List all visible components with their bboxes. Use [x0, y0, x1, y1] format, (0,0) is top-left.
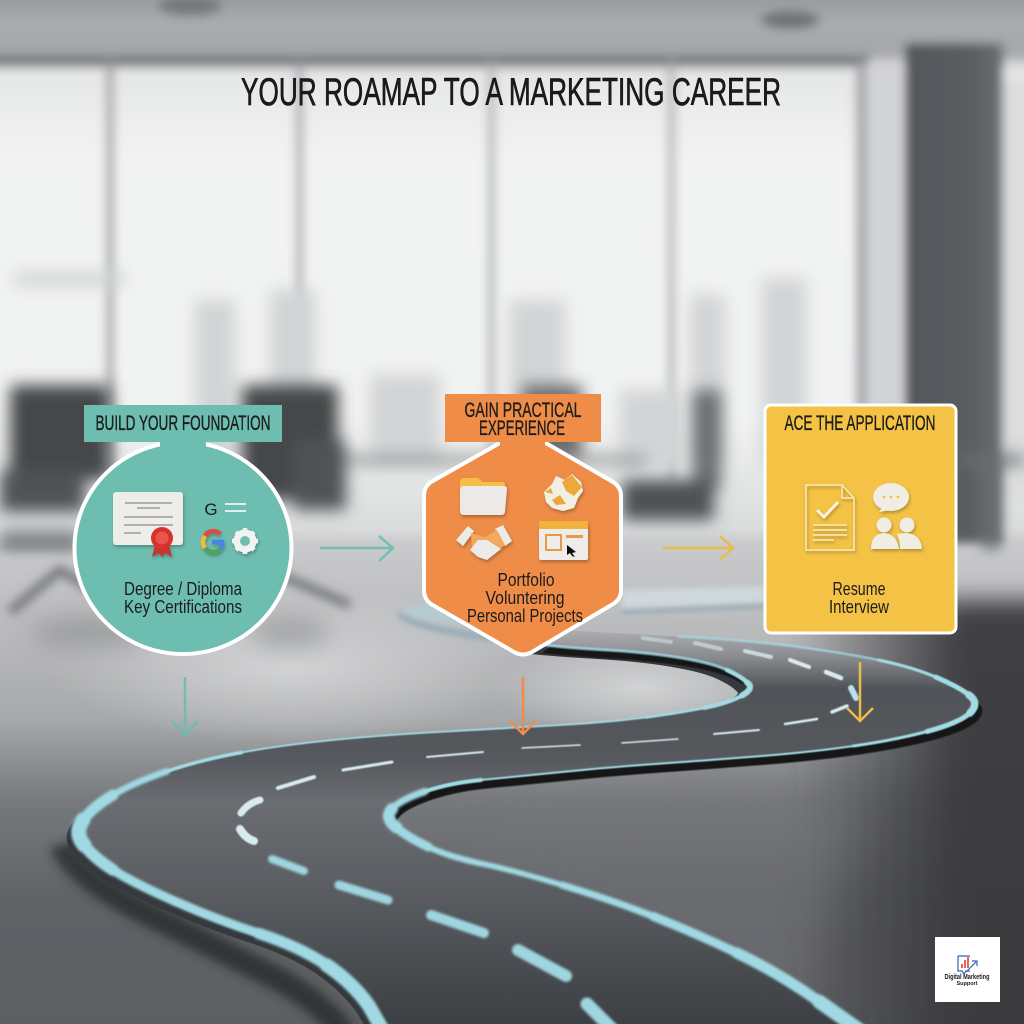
body text [829, 579, 890, 617]
arrow: teal right [320, 536, 393, 561]
icon: G and lines: G [204, 500, 218, 519]
heading: BUILD YOUR FOUNDATION [96, 412, 270, 435]
body text: Interview [829, 597, 890, 617]
heading: GAIN PRACTICAL [464, 399, 582, 422]
logo: Support [956, 981, 978, 987]
icon: resume [806, 485, 854, 550]
panel: gain practical experience [424, 394, 621, 654]
arrow: teal down [172, 677, 198, 735]
glowing right edge line far part [425, 636, 975, 792]
icon: certificate [113, 492, 183, 557]
icon: google g [203, 531, 222, 552]
body text [467, 570, 583, 626]
title: YOUR ROAMAP TO A MARKETING CAREER [241, 71, 781, 114]
connector under banner [500, 430, 545, 448]
card [765, 405, 956, 633]
body text: Personal Projects [467, 606, 583, 626]
icon: crumpled paper [544, 474, 583, 511]
body text: Voluntering [486, 588, 564, 608]
road rim left [70, 636, 966, 1024]
body text: Degree / Diploma [124, 579, 243, 599]
heading [464, 399, 582, 440]
icon: handshake [456, 525, 512, 560]
icon: interview people [871, 483, 922, 549]
heading banner [84, 405, 282, 442]
icon: gear [232, 528, 258, 554]
icon: browser window [539, 521, 588, 560]
heading: EXPERIENCE [479, 417, 565, 440]
road rim right [85, 637, 981, 1024]
floor [0, 552, 1024, 1024]
road shadow near the left edge [62, 845, 345, 1024]
arrow: yellow down [847, 662, 873, 721]
far blurred road section [400, 586, 765, 640]
heading: ACE THE APPLICATION [784, 412, 936, 435]
body text [124, 579, 243, 617]
road surface [79, 630, 975, 1024]
panel: ace the application [765, 405, 956, 633]
glowing left edge line far part [166, 645, 750, 772]
body text: Key Certifications [124, 597, 242, 617]
circle [74, 442, 292, 654]
icon: folder [460, 478, 507, 515]
logo: Digital Marketing [944, 972, 990, 981]
connector under banner [160, 436, 206, 448]
body text: Portfolio [498, 570, 554, 590]
dashed centre line far part [240, 638, 856, 841]
arrow: orange down [510, 677, 536, 734]
icon: G and lines [204, 500, 246, 519]
logo [935, 937, 1000, 1002]
heading banner [445, 394, 601, 442]
arrow: yellow right [663, 536, 733, 560]
panel: build your foundation [74, 405, 292, 654]
hexagon [424, 432, 621, 654]
glowing left edge line near part [79, 772, 385, 1024]
glowing right edge line near part [389, 792, 865, 1024]
dashed centre line near part [272, 859, 615, 1024]
winding road [62, 586, 981, 1024]
body text: Resume [832, 579, 886, 599]
